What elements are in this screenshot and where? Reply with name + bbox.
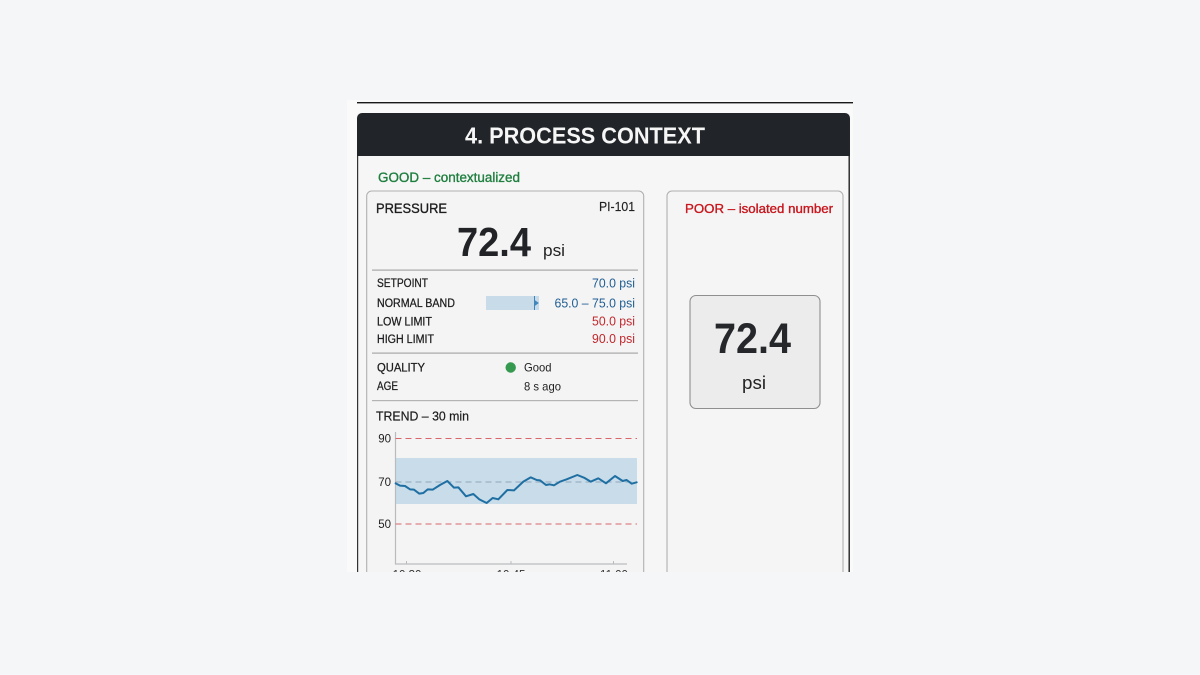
isolated value box (690, 296, 820, 408)
trend chart: 10:30 (393, 570, 421, 582)
trend chart: 70 (378, 477, 391, 489)
trend chart: 90 (378, 434, 391, 446)
limits table: SETPOINT (377, 278, 428, 290)
pressure value: 72.4 (457, 219, 531, 265)
pressure label: PRESSURE (376, 200, 447, 216)
quality and age: AGE (377, 381, 398, 393)
quality and age: Good (524, 360, 552, 374)
panel: process context card (357, 113, 850, 591)
limits table: LOW LIMIT (377, 316, 432, 328)
heading: good example: GOOD – contextualized (378, 170, 520, 185)
heading band: 4. PROCESS CONTEXT (465, 122, 705, 148)
trend chart: 10:45 (497, 570, 525, 582)
trend chart: 11:00 (600, 570, 628, 582)
trend heading: TREND – 30 min (376, 408, 469, 424)
pressure value: psi (543, 242, 565, 260)
tag id: PI-101 (599, 200, 635, 214)
limits table: 90.0 psi (592, 332, 635, 346)
panel: poor example (667, 191, 843, 591)
trend chart: 50 (378, 519, 391, 531)
limits table: 70.0 psi (592, 276, 635, 290)
isolated value box: psi (742, 372, 766, 393)
quality and age: QUALITY (377, 362, 425, 374)
panel: good example (367, 191, 644, 591)
limits table: NORMAL BAND (377, 298, 455, 310)
heading band (357, 113, 850, 156)
heading: poor example: POOR – isolated number (685, 201, 834, 216)
limits table: HIGH LIMIT (377, 334, 434, 346)
quality and age: 8 s ago (524, 380, 561, 394)
trend chart (378, 432, 637, 582)
limits table: 50.0 psi (592, 314, 635, 328)
limits table: 65.0 – 75.0 psi (554, 296, 635, 310)
quality and age (377, 360, 561, 394)
limits table (377, 276, 635, 346)
isolated value box: 72.4 (714, 315, 791, 363)
